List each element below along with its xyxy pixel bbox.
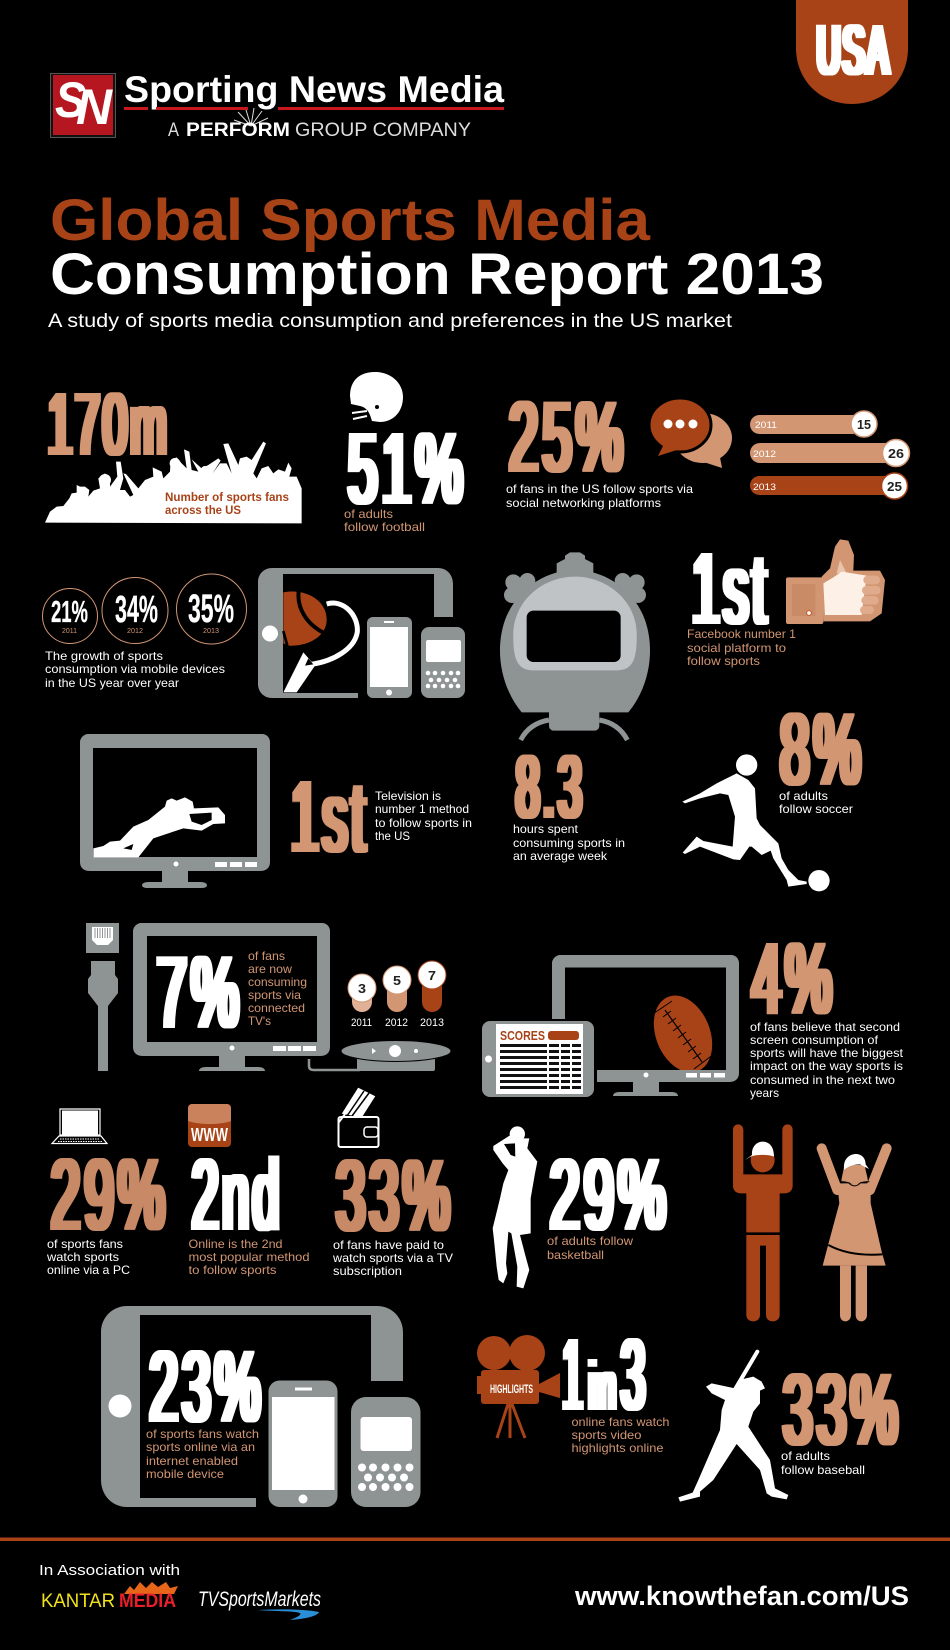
panel: 33% subscription xyxy=(332,1087,454,1278)
caption: hours spent xyxy=(513,822,579,836)
title xyxy=(50,188,824,307)
title: Consumption Report 2013 xyxy=(50,242,824,307)
caption xyxy=(547,1234,633,1262)
icon: fans man and woman xyxy=(733,1124,887,1321)
logo: TV Sports Markets xyxy=(198,1588,321,1620)
pill: 2013 xyxy=(418,961,446,1029)
logo: Kantar Media: MEDIA xyxy=(119,1591,176,1612)
badge: 34% 2012: 2012 xyxy=(127,628,143,635)
caption: are now xyxy=(248,962,292,976)
caption: across the US xyxy=(165,503,241,517)
caption xyxy=(344,507,425,534)
number: 1 in 3: in xyxy=(589,1348,618,1424)
wordmark: Sporting News Media xyxy=(124,69,504,110)
caption: follow sports xyxy=(687,654,760,668)
caption: of fans xyxy=(248,949,285,963)
panel: 29% basketball xyxy=(493,1126,670,1288)
caption xyxy=(781,1449,865,1477)
caption: most popular method xyxy=(188,1250,310,1264)
caption xyxy=(45,649,225,690)
caption: of sports fans watch xyxy=(146,1427,259,1441)
logo: Kantar Media: KANTAR xyxy=(41,1591,115,1612)
pill: 2011 xyxy=(348,974,376,1029)
caption: watch sports via a TV xyxy=(332,1251,453,1265)
icon: man xyxy=(733,1124,793,1321)
icon: laptop xyxy=(52,1109,107,1144)
caption: consumed in the next two xyxy=(750,1073,895,1087)
panel: 8.3 hours: 8.3 xyxy=(516,737,585,836)
caption xyxy=(146,1427,259,1481)
pill: 2012: 5 xyxy=(393,973,401,988)
caption: of adults xyxy=(779,789,828,803)
icon: helmet xyxy=(350,372,403,422)
badge: 34% 2012 xyxy=(102,578,168,644)
panel: 33% baseball xyxy=(678,1352,902,1502)
caption xyxy=(248,949,307,1028)
number: 23%: 23% xyxy=(150,1331,264,1443)
panel: Television 1st xyxy=(80,734,472,888)
bar: 2011: 15 xyxy=(857,417,871,432)
number: 4%: 4% xyxy=(752,923,836,1035)
caption: an average week xyxy=(513,849,608,863)
bar: 2012: 26 xyxy=(888,446,904,461)
badge: 35% 2013 xyxy=(176,574,246,644)
caption: consuming xyxy=(248,975,307,989)
subtitle: A study of sports media consumption and preferences in the US market xyxy=(48,310,733,332)
panel: 51% football xyxy=(344,372,467,534)
caption: internet enabled xyxy=(146,1454,238,1468)
panel: mobile growth xyxy=(42,568,465,698)
icon: tablet with scores xyxy=(480,1019,597,1099)
icon: big keypad phone xyxy=(351,1397,420,1507)
logo: Sporting News Media xyxy=(50,69,504,141)
icon: tablet with scores: SCORES xyxy=(500,1028,545,1043)
icon: crowd silhouette xyxy=(45,442,302,523)
icon: WWW: WWW xyxy=(191,1125,228,1145)
caption: of fans in the US follow sports via xyxy=(506,482,693,496)
bar: 2012: 2012 xyxy=(753,449,776,460)
icon: woman xyxy=(822,1148,887,1321)
icon: TV with football xyxy=(552,955,739,1096)
number: 8%: 8% xyxy=(780,694,865,806)
panel: Facebook 1st xyxy=(687,533,885,668)
logo: Kantar Media xyxy=(41,1582,178,1612)
caption: TV's xyxy=(248,1014,271,1028)
badge: 21% 2011: 2011 xyxy=(62,628,77,635)
caption: of fans believe that second xyxy=(750,1020,900,1034)
number: 1 in 3: 1 xyxy=(563,1319,582,1431)
caption: sports video xyxy=(572,1428,642,1442)
panel: 29% PC xyxy=(46,1109,169,1277)
tagline: A xyxy=(168,120,179,141)
caption: number 1 method xyxy=(375,802,469,816)
caption: screen consumption of xyxy=(750,1033,879,1047)
silhouette: batter xyxy=(678,1352,788,1502)
number: 51%: 51% xyxy=(348,413,467,525)
badge: 35% 2013: 2013 xyxy=(203,628,219,635)
pill: 2013: 2013 xyxy=(420,1017,444,1029)
caption: follow baseball xyxy=(781,1463,865,1477)
panel: 8% soccer xyxy=(682,694,865,891)
icon: SN square: N xyxy=(76,79,113,135)
icon: big phone xyxy=(268,1380,338,1507)
caption: social networking platforms xyxy=(506,496,661,510)
caption xyxy=(506,482,693,510)
panel: 1 in 3 highlights xyxy=(477,1319,670,1455)
caption xyxy=(165,490,289,517)
chart: connected TV by year xyxy=(348,961,446,1029)
caption: of adults xyxy=(781,1449,830,1463)
icon: stopwatch xyxy=(500,552,650,740)
badge: 35% 2013: 35% xyxy=(188,587,234,631)
tagline xyxy=(168,108,471,141)
bar: 2013: 2013 xyxy=(753,482,776,493)
caption: Online is the 2nd xyxy=(188,1237,282,1251)
icon: WWW xyxy=(188,1104,231,1147)
bar: 2011 xyxy=(750,411,877,437)
pill: 2011: 2011 xyxy=(351,1017,372,1029)
number: 7%: 7% xyxy=(157,937,243,1049)
icon: movie camera xyxy=(477,1335,560,1438)
caption: impact on the way sports is xyxy=(750,1059,903,1073)
caption: the US xyxy=(375,829,410,843)
tagline: GROUP COMPANY xyxy=(295,120,471,141)
badge: 21% 2011: 21% xyxy=(51,594,88,629)
number: 25%: 25% xyxy=(509,381,627,492)
caption xyxy=(188,1237,310,1277)
icon: ethernet cable xyxy=(86,923,119,1071)
caption: Number of sports fans xyxy=(165,490,289,504)
caption: subscription xyxy=(333,1264,402,1278)
bar chart: social growth xyxy=(750,411,910,499)
panel: 8.3 hours xyxy=(500,552,650,863)
caption: of adults follow xyxy=(547,1234,633,1248)
panel: 1 in 3 highlights: 3 xyxy=(621,1319,645,1431)
caption: Facebook number 1 xyxy=(687,627,796,641)
bar: 2011: 2011 xyxy=(755,420,777,431)
pill: 2012 xyxy=(383,966,411,1029)
caption xyxy=(46,1237,130,1277)
caption xyxy=(750,1020,904,1100)
panel: 170m sports fans: 170m xyxy=(48,376,170,473)
caption: The growth of sports xyxy=(45,649,163,663)
caption: connected xyxy=(248,1001,305,1015)
panel: 2nd online: 2nd xyxy=(192,1139,283,1251)
icon: big tablet xyxy=(101,1306,403,1507)
icon: movie camera: HIGHLIGHTS xyxy=(490,1382,533,1396)
panel: 170m sports fans xyxy=(45,376,302,523)
footer: URL: www.knowthefan.com/US xyxy=(574,1581,909,1611)
caption: sports online via an xyxy=(146,1440,255,1454)
caption xyxy=(375,789,472,843)
title: Global Sports Media xyxy=(50,188,651,253)
caption xyxy=(572,1415,670,1455)
caption: social platform to xyxy=(687,641,786,655)
pill: 2013: 7 xyxy=(428,968,436,983)
caption: follow football xyxy=(344,520,425,534)
caption xyxy=(332,1238,453,1278)
caption: of fans have paid to xyxy=(333,1238,444,1252)
icon: keypad phone xyxy=(421,627,465,698)
icon: phone xyxy=(367,617,412,698)
caption xyxy=(687,627,796,668)
number: 33%: 33% xyxy=(336,1140,454,1252)
caption xyxy=(779,789,853,816)
panel: 25% social networking xyxy=(506,381,910,510)
caption: mobile device xyxy=(146,1467,224,1481)
silhouette: diving player xyxy=(93,797,225,857)
silhouette: basketball player xyxy=(493,1126,537,1288)
pill: 2012: 2012 xyxy=(385,1017,408,1029)
logo: TV Sports Markets: TVSportsMarkets xyxy=(198,1588,321,1611)
icon: set-top box xyxy=(309,1040,451,1071)
icon: wallet xyxy=(338,1087,378,1147)
caption: follow soccer xyxy=(779,802,853,816)
caption: Television is xyxy=(375,789,441,803)
panel: 23% mobile xyxy=(101,1306,420,1507)
caption: basketball xyxy=(547,1248,604,1262)
caption: of sports fans xyxy=(47,1237,123,1251)
badge: USA xyxy=(796,0,908,104)
number: 29%: 29% xyxy=(550,1139,670,1251)
caption: highlights online xyxy=(572,1441,664,1455)
caption: watch sports xyxy=(46,1250,119,1264)
pill: 2011: 3 xyxy=(358,981,366,996)
silhouette: soccer player xyxy=(682,754,830,891)
icon: speech bubbles xyxy=(649,398,732,468)
icon: tablet with tennis xyxy=(258,568,453,698)
icon: SN square: S xyxy=(55,72,86,128)
tagline: PERFORM xyxy=(186,120,290,141)
caption: consuming sports in xyxy=(513,836,625,850)
number: 29%: 29% xyxy=(51,1139,169,1251)
caption: sports via xyxy=(248,988,301,1002)
badge: 34% 2012: 34% xyxy=(115,589,158,631)
panel: 7% connected TV xyxy=(86,923,451,1071)
bar: 2013: 25 xyxy=(887,479,902,494)
caption: sports will have the biggest xyxy=(750,1046,904,1060)
number: 1 in 3 xyxy=(563,1319,645,1431)
caption: online fans watch xyxy=(572,1415,670,1429)
badge: 21% 2011 xyxy=(42,588,98,644)
bar: 2013 xyxy=(750,473,908,499)
caption: in the US year over year xyxy=(45,676,179,690)
icon: connected TV xyxy=(133,923,330,1071)
caption: to follow sports xyxy=(188,1263,276,1277)
icon: SN square xyxy=(50,72,116,138)
caption: of adults xyxy=(344,507,393,521)
bar: 2012 xyxy=(750,440,910,466)
caption xyxy=(513,822,625,863)
panel: 4% second screen xyxy=(480,923,904,1100)
icon: TV with diving player xyxy=(80,734,270,888)
text: In Association with: In Association with xyxy=(39,1563,180,1579)
caption: online via a PC xyxy=(47,1263,130,1277)
panel: Television 1st: 1st xyxy=(291,761,369,873)
caption: years xyxy=(750,1086,779,1100)
footer: association xyxy=(39,1563,321,1620)
caption: consumption via mobile devices xyxy=(45,662,225,676)
icon: thumbs up xyxy=(786,539,885,624)
caption: to follow sports in xyxy=(375,816,472,830)
panel: Facebook 1st: 1st xyxy=(692,533,770,645)
panel: 2nd online xyxy=(188,1104,310,1277)
icon: football xyxy=(643,987,723,1081)
